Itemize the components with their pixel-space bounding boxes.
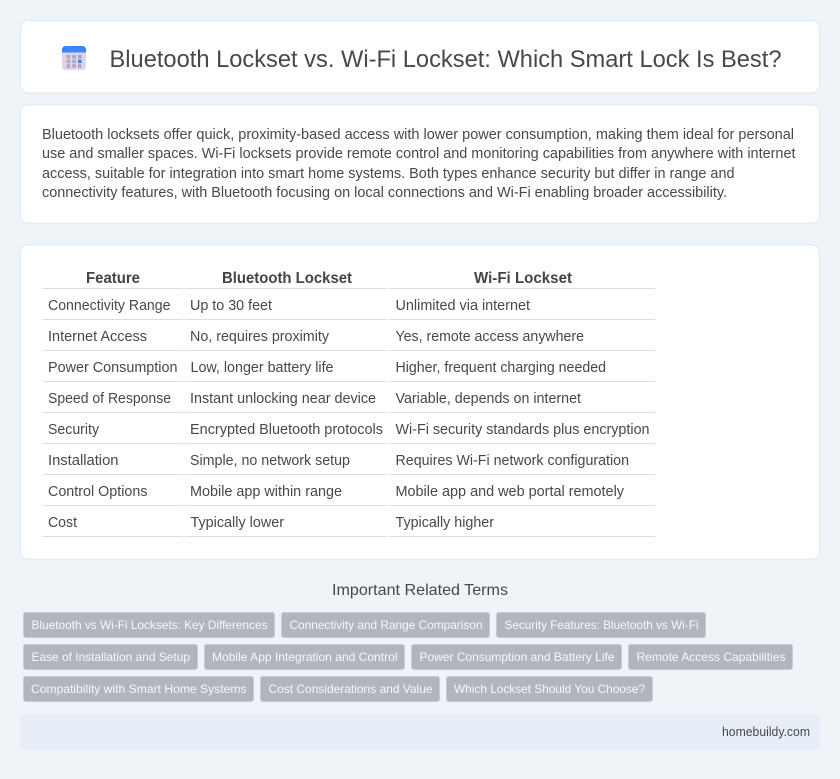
row: security: Encrypted Bluetooth protocols bbox=[190, 422, 383, 438]
row: control options: Mobile app and web portal remotely bbox=[396, 484, 625, 500]
row: control options: Mobile app within range bbox=[190, 484, 342, 500]
tag: security features: Security Features: Bluetooth vs Wi-Fi bbox=[504, 618, 698, 632]
tag: cost considerations bbox=[260, 676, 440, 702]
footer bar bbox=[20, 715, 820, 749]
row: security: Security bbox=[48, 422, 100, 438]
row: power consumption: Power Consumption bbox=[48, 360, 178, 376]
row: connectivity range: Unlimited via internet bbox=[396, 298, 530, 314]
row: speed of response: Variable, depends on internet bbox=[396, 391, 581, 407]
row: installation bbox=[43, 453, 655, 475]
row: cost: Cost bbox=[48, 515, 77, 531]
related terms tags bbox=[24, 612, 792, 702]
row: speed of response: Speed of Response bbox=[48, 391, 171, 407]
table header row: Bluetooth Lockset bbox=[222, 270, 353, 287]
row: internet access: Internet Access bbox=[48, 329, 147, 345]
icon: calendar grid bbox=[62, 46, 86, 70]
heading: important related terms: Important Related Terms bbox=[332, 582, 508, 599]
tag: smart home compatibility: Compatibility with Smart Home Systems bbox=[31, 682, 246, 696]
tag: power consumption: Power Consumption and Battery Life bbox=[420, 650, 615, 664]
summary text: Bluetooth locksets offer quick, proximity-based access with lower power consumption, making them ideal for personal bbox=[42, 127, 794, 143]
row: connectivity range: Up to 30 feet bbox=[190, 298, 272, 314]
tag: which lockset bbox=[446, 676, 652, 702]
tag: connectivity and range: Connectivity and Range Comparison bbox=[290, 618, 482, 632]
row: security: Wi-Fi security standards plus encryption bbox=[396, 422, 650, 438]
table header row: Wi-Fi Lockset bbox=[474, 270, 573, 287]
tag: ease of installation bbox=[24, 644, 198, 670]
row: security bbox=[43, 422, 655, 444]
row: control options bbox=[43, 484, 655, 506]
summary text bbox=[42, 127, 795, 201]
table header row: Feature bbox=[86, 270, 140, 287]
tag: ease of installation: Ease of Installation and Setup bbox=[32, 650, 190, 664]
tag: remote access bbox=[628, 644, 792, 670]
row: cost bbox=[43, 515, 655, 537]
row: speed of response bbox=[43, 391, 655, 413]
summary text: use and smaller spaces. Wi-Fi locksets provide remote control and monitoring capabilities from anywhere with internet bbox=[42, 146, 795, 162]
tag: connectivity and range bbox=[282, 612, 490, 638]
row: power consumption: Higher, frequent charging needed bbox=[396, 360, 606, 376]
tag: key differences: Bluetooth vs Wi-Fi Locksets: Key Differences bbox=[32, 618, 268, 632]
row: internet access: Yes, remote access anywhere bbox=[396, 329, 584, 345]
summary text: connectivity features, with Bluetooth focusing on local connections and Wi-Fi enabling broader accessibility. bbox=[42, 185, 727, 201]
row: cost: Typically lower bbox=[190, 515, 284, 531]
row: power consumption bbox=[43, 360, 655, 382]
row: connectivity range: Connectivity Range bbox=[48, 298, 170, 314]
title: Bluetooth Lockset vs. Wi-Fi Lockset: Which Smart Lock Is Best? bbox=[110, 46, 782, 73]
footer source text: homebuildy.com bbox=[722, 725, 810, 739]
tag: cost considerations: Cost Considerations and Value bbox=[268, 682, 433, 696]
row: installation: Requires Wi-Fi network configuration bbox=[396, 453, 629, 469]
tag: smart home compatibility bbox=[24, 676, 254, 702]
tag: power consumption bbox=[412, 644, 622, 670]
row: speed of response: Instant unlocking near device bbox=[190, 391, 376, 407]
panel: header bbox=[20, 20, 820, 93]
summary text: access, suitable for integration into smart home systems. Both types enhance security but differ in range and bbox=[42, 166, 734, 182]
row: power consumption: Low, longer battery life bbox=[190, 360, 334, 376]
row: internet access bbox=[43, 329, 655, 351]
row: internet access: No, requires proximity bbox=[190, 329, 330, 345]
tag: which lockset: Which Lockset Should You Choose? bbox=[454, 682, 645, 696]
row: control options: Control Options bbox=[48, 484, 148, 500]
row: installation: Installation bbox=[48, 453, 118, 469]
tag: key differences bbox=[24, 612, 274, 638]
row: cost: Typically higher bbox=[396, 515, 494, 531]
panel: summary paragraph bbox=[20, 105, 820, 223]
panel: comparison table bbox=[20, 245, 820, 559]
tag: mobile app integration bbox=[204, 644, 404, 670]
table header row bbox=[43, 270, 655, 289]
tag: remote access: Remote Access Capabilities bbox=[636, 650, 786, 664]
tag: security features bbox=[496, 612, 706, 638]
row: connectivity range bbox=[43, 298, 655, 320]
tag: mobile app integration: Mobile App Integration and Control bbox=[212, 650, 398, 664]
row: installation: Simple, no network setup bbox=[190, 453, 350, 469]
